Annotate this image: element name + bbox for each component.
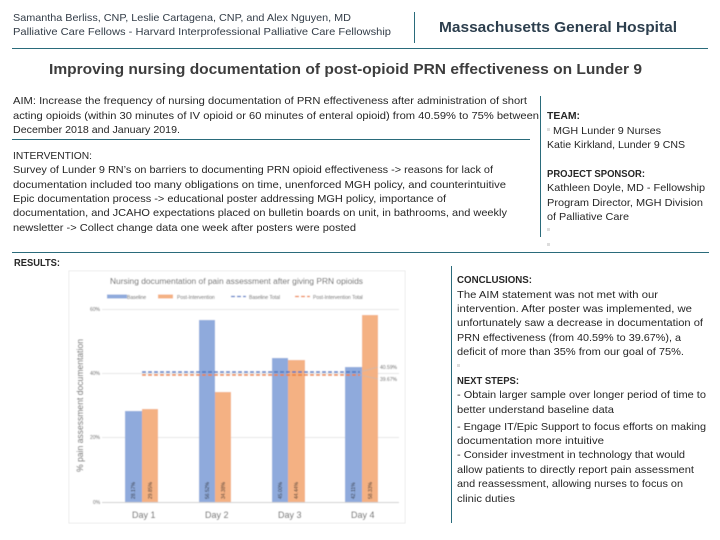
x axis labels [132, 510, 375, 520]
chart legend: Baseline Total [249, 295, 280, 301]
project sponsor: Program Director, MGH Division [547, 197, 703, 209]
chart legend [107, 294, 363, 301]
title: Improving nursing documentation of post-opioid PRN effectiveness on Lunder 9 [49, 61, 642, 78]
grid lines [102, 310, 399, 502]
y axis labels [90, 307, 101, 506]
intervention: documentation included too many obligations on time, unenforced MGH policy, and counterintuitive [13, 179, 506, 191]
y axis labels: 0% [93, 500, 101, 506]
team: MGH Lunder 9 Nurses [553, 125, 661, 137]
y axis title: % pain assessment documentation [75, 339, 85, 472]
x axis labels: Day 1 [132, 510, 156, 520]
chart title: Nursing documentation of pain assessment after giving PRN opioids [110, 277, 363, 286]
next steps: NEXT STEPS: [457, 375, 519, 387]
intervention: documentation, and JCAHO expectations placed on bulletin boards on unit, in bathrooms, and weekly [13, 207, 508, 219]
bar value labels: 45.00% [278, 481, 284, 499]
bar value labels: 29.85% [148, 481, 154, 499]
chart legend: Baseline [127, 295, 146, 301]
conclusions: deficit of more than 35% from our goal of 75%. [457, 346, 684, 358]
chart: nursing documentation bar chart [68, 270, 406, 524]
intervention [13, 150, 508, 234]
next steps: documentation more intuitive [457, 435, 604, 447]
authors: Samantha Berliss, CNP, Leslie Cartagena, CNP, and Alex Nguyen, MD [13, 12, 351, 24]
results heading: RESULTS: [14, 257, 60, 269]
intervention: Epic documentation process -> educational poster addressing MGH policy, importance of [13, 193, 446, 205]
conclusions [457, 274, 703, 367]
team: Katie Kirkland, Lunder 9 CNS [547, 139, 685, 151]
aim statement: acting opioids (within 30 minutes of IV opioid or 60 minutes of enteral opioid) from 40.59% to 75% between [13, 110, 539, 122]
aim statement: December 2018 and January 2019. [13, 124, 180, 136]
project sponsor: Kathleen Doyle, MD - Fellowship [547, 182, 705, 194]
aim statement: AIM: Increase the frequency of nursing documentation of PRN effectiveness after administration of short [13, 95, 527, 107]
conclusions: intervention. After poster was implemented, we [457, 303, 692, 315]
next steps: better understand baseline data [457, 404, 614, 416]
next steps: clinic duties [457, 493, 515, 505]
bar value labels: 28.17% [131, 481, 137, 499]
y axis labels: 40% [90, 371, 101, 377]
aim statement [13, 95, 539, 136]
y axis labels: 20% [90, 435, 101, 441]
x axis labels: Day 2 [205, 510, 229, 520]
bar value labels: 44.44% [294, 481, 300, 499]
x axis labels: Day 4 [351, 510, 375, 520]
chart legend: Post-Intervention [177, 295, 215, 301]
conclusions: The AIM statement was not met with our [457, 289, 659, 301]
bar value labels: 56.52% [205, 481, 211, 499]
next steps: allow patients to directly report pain assessment [457, 464, 694, 476]
bar value labels: 34.38% [221, 481, 227, 499]
next steps: - Engage IT/Epic Support to focus efforts on making [457, 421, 706, 433]
project sponsor: PROJECT SPONSOR: [547, 168, 645, 180]
y axis labels: 60% [90, 307, 101, 313]
next steps [457, 375, 706, 505]
total labels: 39.67% [380, 377, 398, 383]
hospital name: Massachusetts General Hospital [439, 19, 677, 36]
total dashed lines [142, 372, 360, 375]
team: TEAM: [547, 110, 580, 122]
chart legend: Post-Intervention Total [313, 295, 363, 301]
total labels [360, 365, 398, 383]
next steps: - Consider investment in technology that would [457, 449, 685, 461]
intervention: newsletter -> Collect change data one week after posters were posted [13, 222, 356, 234]
bars [125, 315, 378, 502]
next steps: - Obtain larger sample over longer period of time to [457, 389, 706, 401]
intervention: Survey of Lunder 9 RN’s on barriers to documenting PRN opioid effectiveness -> reasons for lack of [13, 164, 493, 176]
bar value labels: 42.11% [351, 482, 357, 499]
authors [13, 12, 391, 38]
authors: Palliative Care Fellows - Harvard Interprofessional Palliative Care Fellowship [13, 26, 391, 38]
bar value labels: 58.33% [368, 481, 374, 499]
project sponsor: of Palliative Care [547, 211, 629, 223]
conclusions: unfortunately saw a decrease in documentation of [457, 317, 703, 329]
project sponsor [547, 168, 705, 246]
conclusions: PRN effectiveness (from 40.59% to 39.67%), a [457, 332, 681, 344]
intervention: INTERVENTION: [13, 150, 92, 162]
conclusions: CONCLUSIONS: [457, 274, 532, 286]
next steps: and reassessment, allowing nurses to focus on [457, 478, 683, 490]
x axis labels: Day 3 [278, 510, 302, 520]
bar value labels [131, 481, 374, 499]
team [547, 110, 685, 151]
total labels: 40.59% [380, 365, 398, 371]
